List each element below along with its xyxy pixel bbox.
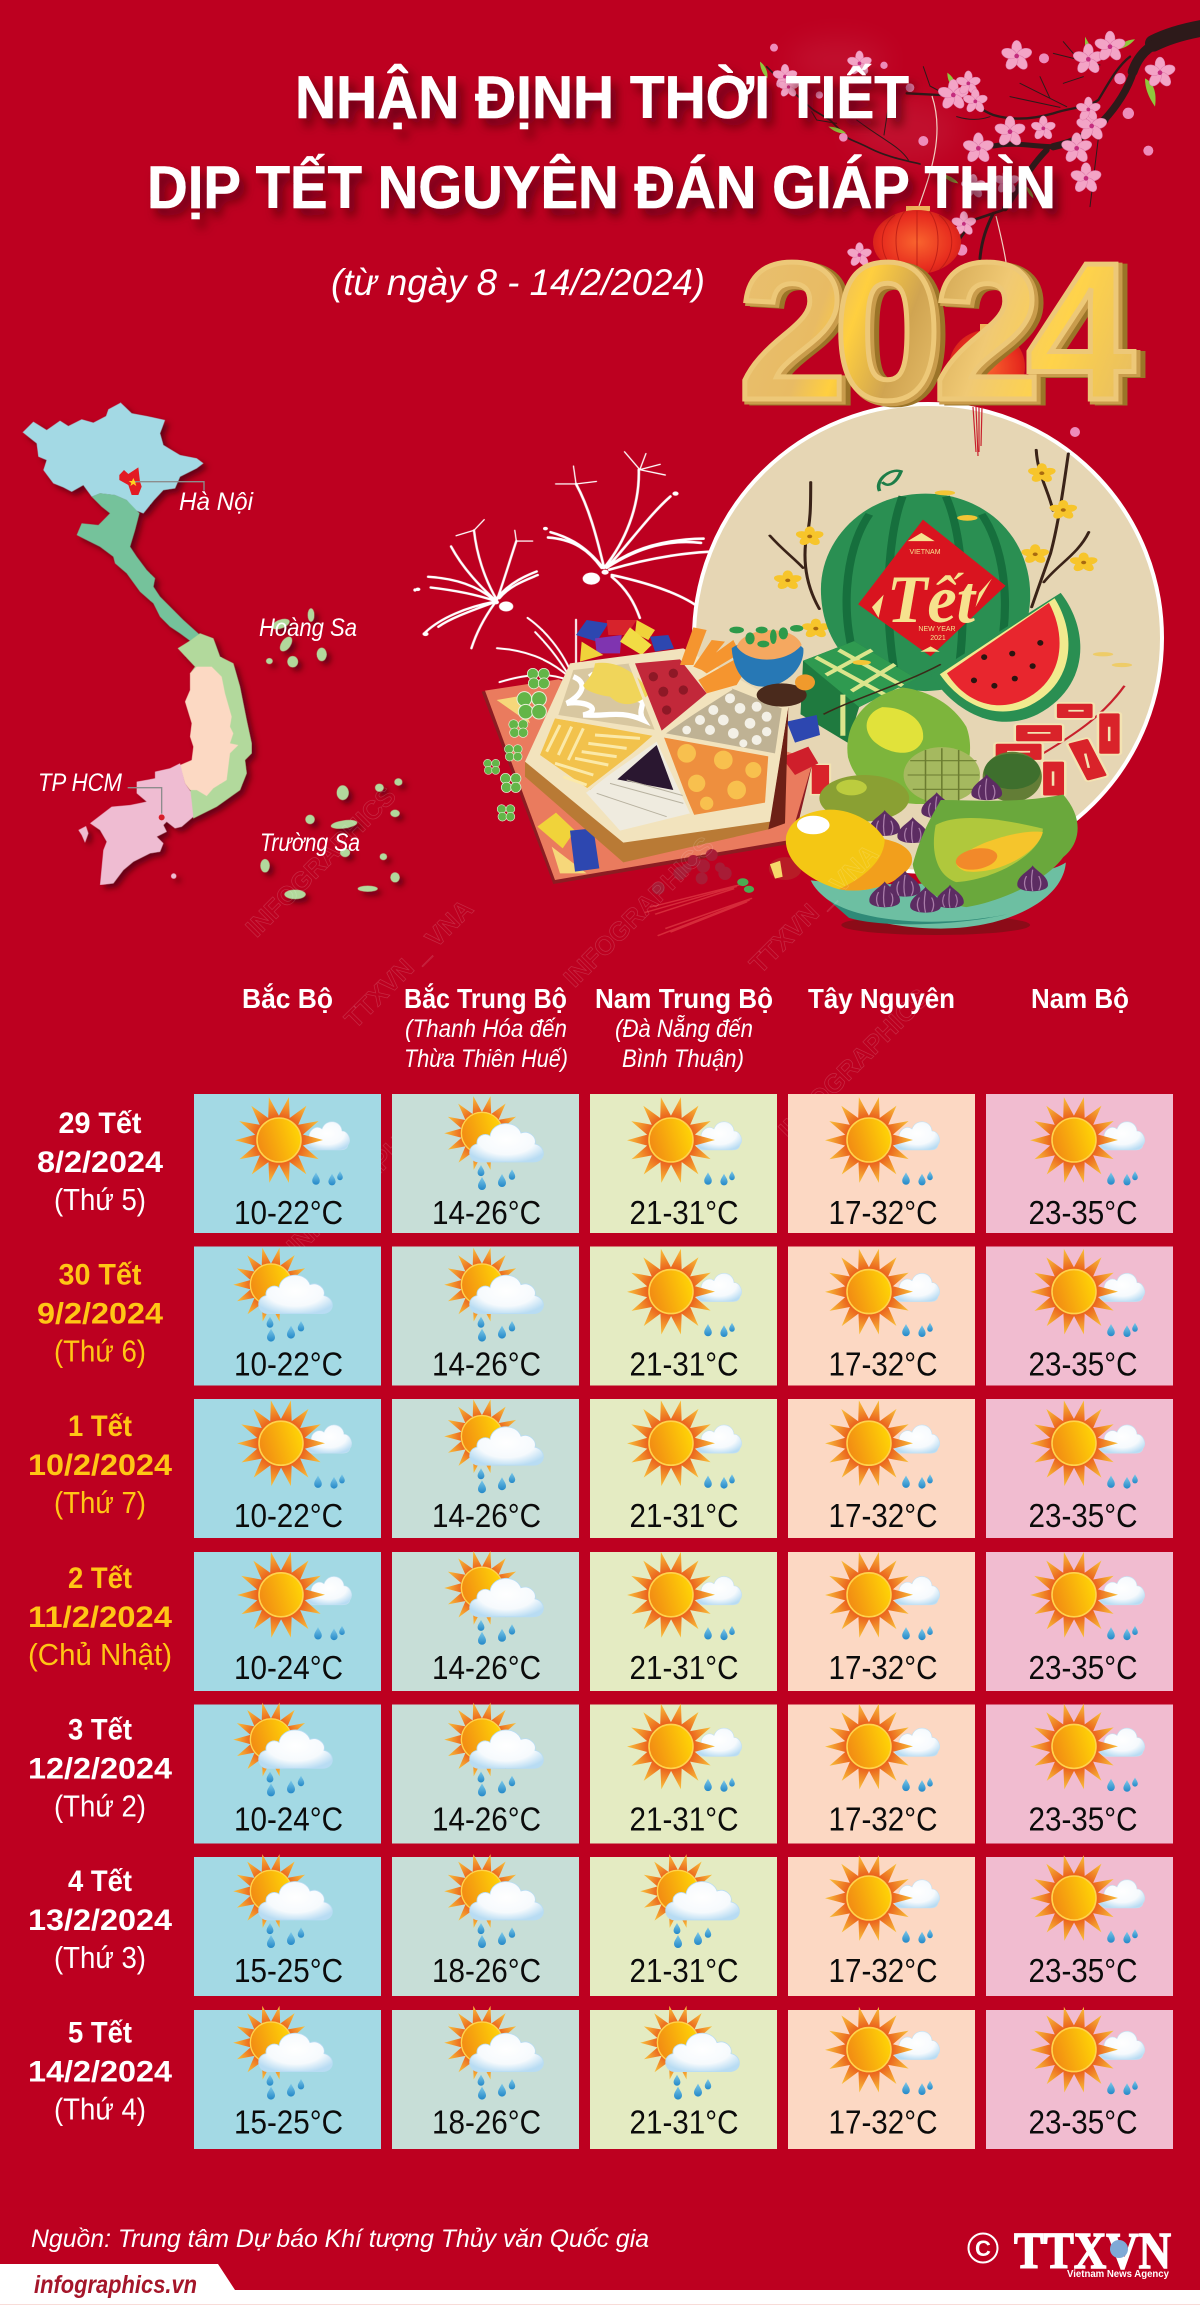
cell: Tây Nguyên: 17-32°C (828, 1346, 938, 1383)
region: Nam Bộ (90, 763, 193, 885)
compartment: red fruit (635, 659, 707, 731)
title (147, 64, 1056, 221)
footer tab (0, 2264, 1200, 2305)
cell: Tây Nguyên (788, 1399, 975, 1538)
compartment: white sticks (585, 742, 690, 831)
candies (537, 620, 820, 872)
firecrackers (811, 686, 1124, 796)
custard apples (983, 752, 1042, 802)
cell: Nam Bộ: 23-35°C (1028, 1952, 1138, 1989)
date label (28, 2017, 172, 2127)
cell: Bắc Bộ (194, 2004, 381, 2149)
compartment: yellow cake (540, 718, 653, 790)
orange sticks (680, 627, 747, 693)
mat (482, 680, 813, 884)
cell: Tây Nguyên (788, 2005, 975, 2149)
cell: Tây Nguyên (788, 1854, 975, 1996)
cell: Nam Trung Bộ (590, 1550, 777, 1691)
watermelon (821, 471, 1030, 691)
cell: Nam Bộ (986, 2005, 1173, 2149)
compartment: coconut lace (558, 663, 657, 730)
cell: Tây Nguyên (788, 1094, 975, 1233)
subtitle: (từ ngày 8 - 14/2/2024) (331, 262, 705, 303)
TTXVN logo: Vietnam News Agency (1067, 2268, 1169, 2280)
cell: Bắc Trung Bộ (392, 1246, 579, 1386)
cell: Tây Nguyên: 17-32°C (828, 1649, 938, 1686)
watermarks: INFOGRAPHICS (281, 1099, 443, 1261)
cell: Nam Bộ (986, 1399, 1173, 1538)
cell: Tây Nguyên (788, 1702, 975, 1844)
row 1: 29 Tết (37, 1094, 1173, 1233)
tassel (973, 407, 982, 456)
row 3: 1 Tết (28, 1398, 1173, 1538)
cell: Bắc Trung Bộ: 18-26°C (432, 2104, 541, 2141)
cell: Nam Trung Bộ: 21-31°C (630, 1497, 738, 1534)
map label: Trường Sa: Trường Sa (260, 829, 360, 857)
region: Bắc Trung Bộ (77, 493, 200, 641)
map of Vietnam (23, 403, 417, 899)
watermarks (240, 781, 935, 1261)
cell: Nam Trung Bộ: 21-31°C (630, 1346, 738, 1383)
date label: 12/2/2024 (28, 1752, 172, 1785)
Hanoi marker (119, 467, 142, 495)
date label: (Thứ 5) (54, 1182, 146, 1217)
date label (28, 1562, 172, 1672)
watermarks: TTXVN _ VNA (743, 838, 884, 979)
date label: 9/2/2024 (37, 1298, 163, 1331)
TTXVN logo (968, 2223, 1171, 2280)
date label (28, 1865, 172, 1975)
year 2024 in gold: 2024 (738, 222, 1135, 441)
leaves (760, 37, 1156, 198)
cell: Nam Bộ (986, 1246, 1173, 1386)
header: Bắc Trung Bộ (404, 983, 568, 1073)
cell: Nam Trung Bộ: 21-31°C (630, 2104, 738, 2141)
cell: Bắc Bộ: 10-24°C (234, 1800, 343, 1837)
footer tab: infographics.vn (34, 2271, 197, 2299)
tet circle backdrop (694, 404, 1162, 872)
gold leaves (853, 490, 1132, 667)
cell: Tây Nguyên: 17-32°C (828, 1194, 938, 1231)
cell: Nam Bộ: 23-35°C (1028, 1346, 1138, 1383)
source note: Nguồn: Trung tâm Dự báo Khí tượng Thủy văn Quốc gia (31, 2225, 649, 2253)
date label: (Thứ 3) (54, 1940, 146, 1975)
clover leaves (484, 668, 549, 821)
cell: Bắc Bộ (194, 1399, 381, 1538)
tet lettering: NEW YEAR (918, 626, 956, 633)
cell: Bắc Bộ: 10-22°C (234, 1497, 343, 1534)
date label: 1 Tết (68, 1410, 132, 1443)
plum blossom branch (760, 28, 1200, 267)
cell: Bắc Trung Bộ: 14-26°C (432, 1346, 541, 1383)
cell: Nam Bộ (986, 1094, 1173, 1233)
watermelon slice (931, 593, 1080, 722)
cell: Nam Trung Bộ: 21-31°C (630, 1952, 738, 1989)
header: Nam Trung Bộ: (Đà Nẵng đến (615, 1014, 753, 1043)
header: Nam Trung Bộ (595, 983, 773, 1073)
region: Bắc Bộ (23, 403, 203, 513)
apricot branches (770, 450, 1089, 609)
header: Bắc Trung Bộ: (Thanh Hóa đến (405, 1015, 567, 1043)
cell: Bắc Trung Bộ (392, 1853, 579, 1996)
watermarks: TTXVN _ VNA (338, 893, 479, 1034)
row 4: 2 Tết (28, 1550, 1173, 1691)
cell: Nam Bộ: 23-35°C (1028, 1497, 1138, 1534)
mango (786, 810, 912, 891)
date label: 11/2/2024 (28, 1601, 172, 1634)
cell: Bắc Bộ: 10-22°C (234, 1194, 343, 1231)
cell: Bắc Trung Bộ: 14-26°C (432, 1497, 541, 1534)
cell: Bắc Trung Bộ (392, 1550, 579, 1691)
column headers (242, 983, 1129, 1073)
date label: 4 Tết (68, 1865, 132, 1898)
islands: Trường Sa (260, 778, 402, 899)
cell: Bắc Trung Bộ: 18-26°C (432, 1952, 541, 1989)
date label: 29 Tết (58, 1107, 142, 1140)
date label (28, 1713, 172, 1823)
lantern: behind year (949, 324, 1025, 404)
cell: Bắc Trung Bộ: 14-26°C (432, 1194, 541, 1231)
cell: Tây Nguyên (788, 1246, 975, 1386)
header: Bắc Trung Bộ: Bắc Trung Bộ (404, 983, 567, 1014)
date label: (Thứ 4) (54, 2092, 146, 2127)
cell: Nam Bộ: 23-35°C (1028, 1194, 1138, 1231)
cell: Nam Trung Bộ (590, 2004, 777, 2149)
cell: Tây Nguyên: 17-32°C (828, 1497, 938, 1534)
year 2024 in gold: 2024 (746, 225, 1143, 444)
cell: Nam Trung Bộ (590, 1246, 777, 1386)
snack tray (482, 620, 820, 895)
cell: Tây Nguyên: 17-32°C (828, 1800, 938, 1837)
date label: 10/2/2024 (28, 1449, 172, 1482)
fruit plate (841, 915, 1030, 935)
tassels (645, 885, 752, 936)
cell: Bắc Trung Bộ: 14-26°C (432, 1649, 541, 1686)
cell: Nam Trung Bộ (590, 1094, 777, 1233)
islands: Hoàng Sa (266, 608, 327, 667)
green coconut (847, 687, 970, 804)
date label (28, 1410, 172, 1520)
cell: Nam Bộ (986, 1550, 1173, 1691)
papaya (913, 795, 1078, 907)
row 6: 4 Tết (28, 1853, 1173, 1996)
date label (37, 1107, 163, 1217)
tet lettering: VIETNAM (909, 549, 941, 556)
cell: Nam Bộ: 23-35°C (1028, 1649, 1138, 1686)
map label: Hà Nội: Hà Nội (179, 488, 254, 516)
cell: Tây Nguyên (788, 1550, 975, 1691)
date label: 5 Tết (68, 2017, 132, 2050)
row 7: 5 Tết (28, 2004, 1173, 2149)
header: Tây Nguyên: Tây Nguyên (808, 983, 955, 1014)
cell: Nam Trung Bộ (590, 1853, 777, 1996)
region: Nam Trung Bộ (178, 633, 252, 818)
cell: Bắc Bộ (194, 1246, 381, 1386)
region: Tây Nguyên (180, 667, 238, 796)
date label (37, 1259, 163, 1369)
cell: Bắc Bộ (194, 1094, 381, 1233)
date label: 2 Tết (68, 1562, 132, 1595)
map label: Hoàng Sa: Hoàng Sa (259, 614, 357, 642)
front figs (869, 865, 1048, 913)
date label: 3 Tết (68, 1713, 132, 1746)
header: Nam Trung Bộ: Bình Thuận) (622, 1045, 744, 1073)
date label: (Thứ 7) (54, 1485, 146, 1520)
date label: (Thứ 2) (54, 1788, 146, 1823)
watermarks: INFOGRAPHICS (773, 983, 935, 1145)
compartment: yellow candied fruit (583, 663, 650, 704)
cell: Bắc Trung Bộ (392, 1094, 579, 1233)
date label: 8/2/2024 (37, 1146, 163, 1179)
cell: Tây Nguyên: 17-32°C (828, 1952, 938, 1989)
figs (869, 774, 1002, 843)
cell: Bắc Bộ: 10-22°C (234, 1346, 343, 1383)
row 5: 3 Tết (28, 1701, 1173, 1844)
green pear (819, 775, 909, 821)
TTXVN logo: C (975, 2236, 991, 2261)
date label: (Thứ 6) (54, 1334, 146, 1369)
watermarks: INFOGRAPHICS (558, 831, 720, 993)
cell: Nam Bộ: 23-35°C (1028, 1800, 1138, 1837)
header: Bắc Trung Bộ: Thừa Thiên Huế) (404, 1045, 568, 1073)
map label: TP HCM: TP HCM (38, 769, 122, 797)
cell: Nam Bộ (986, 1702, 1173, 1844)
row 2: 30 Tết (37, 1246, 1173, 1386)
lantern strings (919, 96, 1006, 262)
cell: Nam Trung Bộ (590, 1702, 777, 1844)
banh chung (801, 641, 916, 743)
tray rim (525, 648, 788, 843)
cell: Nam Bộ (986, 1854, 1173, 1996)
header: Nam Bộ: Nam Bộ (1031, 983, 1129, 1014)
tet lettering: 2021 (930, 635, 946, 642)
tray side (525, 762, 770, 862)
header: Nam Trung Bộ: Nam Trung Bộ (595, 983, 773, 1014)
compartment: white lotus seeds (666, 688, 782, 753)
cell: Nam Bộ: 23-35°C (1028, 2104, 1138, 2141)
header: Bắc Bộ: Bắc Bộ (242, 983, 333, 1014)
TTXVN logo: TTXVN (1014, 2223, 1171, 2280)
bowl (732, 639, 803, 687)
lantern: top (873, 206, 961, 274)
cell: Tây Nguyên: 17-32°C (828, 2104, 938, 2141)
cell: Bắc Trung Bộ (392, 1701, 579, 1844)
cell: Bắc Bộ: 10-24°C (234, 1649, 343, 1686)
title: NHẬN ĐỊNH THỜI TIẾT (295, 64, 909, 131)
cell: Bắc Bộ: 15-25°C (234, 1952, 343, 1989)
cell: Bắc Trung Bộ (392, 1398, 579, 1538)
cell: Bắc Trung Bộ (392, 2004, 579, 2149)
red berries (652, 849, 732, 895)
tet diamond (858, 520, 1006, 656)
date label: 30 Tết (58, 1259, 142, 1292)
title: DỊP TẾT NGUYÊN ĐÁN GIÁP THÌN (147, 154, 1056, 221)
date label: (Chủ Nhật) (28, 1637, 172, 1672)
Tet illustration (415, 404, 1162, 936)
compartment: orange fruit (664, 737, 768, 815)
cell: Nam Trung Bộ: 21-31°C (630, 1800, 738, 1837)
cell: Bắc Bộ (194, 1701, 381, 1844)
fireworks (415, 452, 721, 682)
date label: 13/2/2024 (28, 1904, 172, 1937)
cell: Nam Trung Bộ: 21-31°C (630, 1194, 738, 1231)
date label: 14/2/2024 (28, 2056, 172, 2089)
tet lettering: Tết (887, 561, 977, 637)
year 2024 in gold: 2024 (741, 224, 1138, 443)
cell: Bắc Bộ (194, 1550, 381, 1691)
cell: Bắc Trung Bộ: 14-26°C (432, 1800, 541, 1837)
cell: Nam Trung Bộ: 21-31°C (630, 1649, 738, 1686)
dividers (555, 663, 769, 817)
cell: Bắc Bộ (194, 1853, 381, 1996)
compartment: dark raisins (617, 745, 673, 790)
cell: Nam Trung Bộ (590, 1399, 777, 1538)
watermarks: INFOGRAPHICS (240, 781, 402, 943)
cell: Bắc Bộ: 15-25°C (234, 2104, 343, 2141)
